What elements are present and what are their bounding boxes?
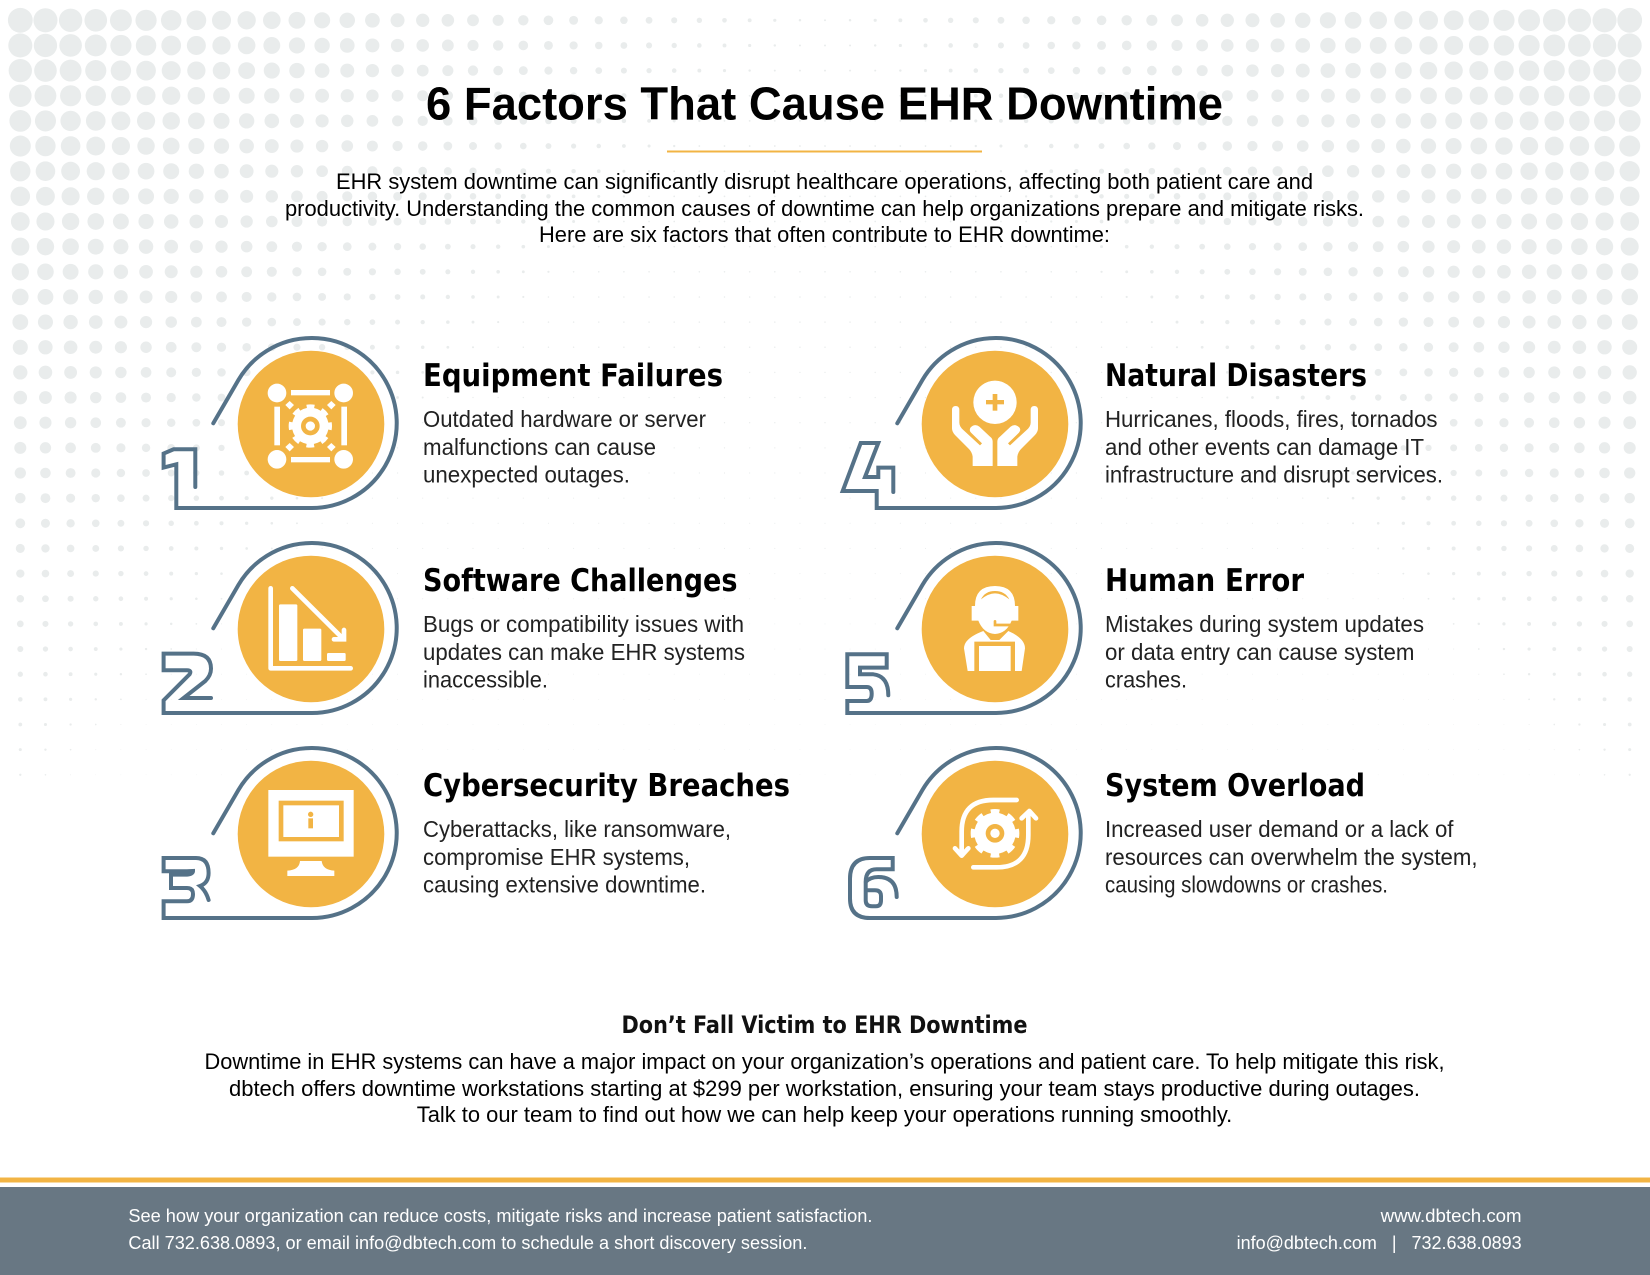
description xyxy=(423,611,745,692)
description: causing slowdowns or crashes. xyxy=(1105,872,1388,898)
description: causing extensive downtime. xyxy=(423,872,706,898)
heading: System Overload xyxy=(1105,768,1365,804)
closing heading: Don’t Fall Victim to EHR Downtime xyxy=(622,1011,1028,1039)
footer contact xyxy=(1237,1206,1522,1253)
badge 1: number ring xyxy=(164,338,397,508)
description: infrastructure and disrupt services. xyxy=(1105,462,1443,488)
footer call to action: Call 732.638.0893, or email info@dbtech.com to schedule a short discovery session. xyxy=(128,1233,807,1253)
description: Bugs or compatibility issues with xyxy=(423,611,744,637)
description: Increased user demand or a lack of xyxy=(1105,816,1454,842)
footer xyxy=(0,1178,1650,1275)
intro text xyxy=(285,169,1364,247)
heading: Cybersecurity Breaches xyxy=(423,768,790,804)
panel: 2 software challenges xyxy=(164,543,745,713)
badge 2: number ring xyxy=(164,543,397,713)
panel: 4 natural disasters xyxy=(843,338,1443,508)
footer contact: www.dbtech.com xyxy=(1380,1206,1522,1226)
description: resources can overwhelm the system, xyxy=(1105,844,1478,870)
badge 4: number ring xyxy=(843,338,1081,508)
intro text: Here are six factors that often contribute to EHR downtime: xyxy=(539,222,1110,247)
badge 3: number ring xyxy=(164,748,397,918)
closing text xyxy=(204,1049,1444,1127)
description xyxy=(423,816,731,898)
description: Outdated hardware or server xyxy=(423,406,706,432)
description: Cyberattacks, like ransomware, xyxy=(423,816,731,842)
footer contact: info@dbtech.com | 732.638.0893 xyxy=(1237,1233,1522,1253)
description: Hurricanes, floods, fires, tornados xyxy=(1105,406,1438,432)
description xyxy=(423,406,706,488)
footer call to action: See how your organization can reduce costs, mitigate risks and increase patient satisfaction. xyxy=(128,1206,872,1226)
description: compromise EHR systems, xyxy=(423,844,690,870)
description: malfunctions can cause xyxy=(423,434,656,460)
description: unexpected outages. xyxy=(423,462,630,488)
badge 5: number ring xyxy=(847,543,1081,713)
panel: 1 equipment failures xyxy=(164,338,723,508)
heading: Software Challenges xyxy=(423,563,738,599)
description: Mistakes during system updates xyxy=(1105,611,1424,637)
icon: computer monitor xyxy=(268,790,354,876)
heading: Human Error xyxy=(1105,563,1304,599)
description: crashes. xyxy=(1105,666,1187,692)
panel: 5 human error xyxy=(847,543,1424,713)
description: and other events can damage IT xyxy=(1105,434,1424,460)
description: or data entry can cause system xyxy=(1105,639,1414,665)
intro text: EHR system downtime can significantly disrupt healthcare operations, affecting both patient care and xyxy=(336,169,1313,194)
icon: hands holding medical cross xyxy=(952,381,1038,466)
icon: support agent with headset xyxy=(964,586,1025,671)
heading: Natural Disasters xyxy=(1105,358,1367,394)
closing text: dbtech offers downtime workstations starting at $299 per workstation, ensuring your team stays productive during outages. xyxy=(229,1076,1420,1101)
badge 6: number ring xyxy=(850,748,1081,918)
description: inaccessible. xyxy=(423,666,548,692)
icon: gear network xyxy=(268,384,353,469)
footer call to action xyxy=(128,1206,872,1253)
description xyxy=(1105,816,1478,898)
description: updates can make EHR systems xyxy=(423,639,745,665)
panel: 3 cybersecurity breaches xyxy=(164,748,790,918)
description xyxy=(1105,406,1443,488)
description xyxy=(1105,611,1424,692)
title: 6 Factors That Cause EHR Downtime xyxy=(426,78,1223,130)
panel: 6 system overload xyxy=(850,748,1478,918)
icon: declining bar chart xyxy=(271,588,351,668)
heading: Equipment Failures xyxy=(423,358,723,394)
intro text: productivity. Understanding the common causes of downtime can help organizations prepare and mitigate risks. xyxy=(285,196,1364,221)
closing text: Talk to our team to find out how we can help keep your operations running smoothly. xyxy=(417,1102,1232,1127)
closing text: Downtime in EHR systems can have a major impact on your organization’s operations and patient care. To help mitigate this risk, xyxy=(204,1049,1444,1074)
icon: gear with cycle arrows xyxy=(955,800,1036,867)
